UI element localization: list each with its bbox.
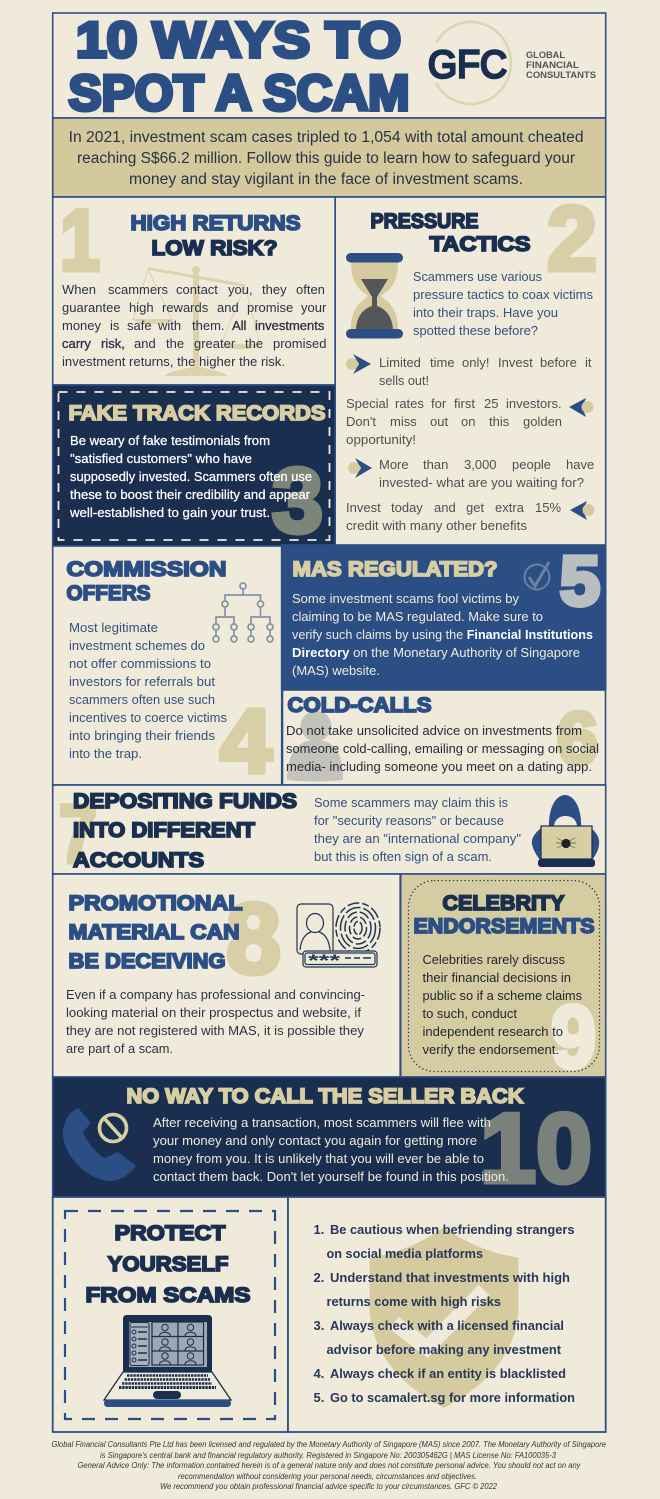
body text: your — [301, 300, 327, 315]
number 5: 5 — [560, 542, 600, 620]
heading: HIGH RETURNS — [130, 212, 300, 235]
body text: Celebrities rarely discuss — [422, 952, 565, 967]
number 10: 10 — [480, 1093, 592, 1203]
intro band: In 2021, investment scam cases tripled to 1,054 with total amount cheated — [69, 129, 584, 146]
heading — [370, 210, 530, 256]
intro band: reaching S$66.2 million. Follow this guide to learn how to safeguard your — [77, 150, 575, 167]
body text: but this is often sign of a scam. — [314, 849, 492, 864]
bullet 3: people — [512, 457, 551, 472]
body text: promised — [273, 336, 326, 351]
logo: GFC — [428, 22, 597, 104]
icon: check mark — [524, 562, 550, 590]
icon: shield with check — [370, 1227, 518, 1408]
body text: and — [134, 336, 156, 351]
tips text: 3. — [314, 1318, 324, 1333]
bullet 1: it — [585, 355, 592, 370]
body text: are part of a scam. — [66, 1041, 173, 1056]
footer disclaimer: We recommend you obtain professional financial advice specific to your circumstances. GFC © 2022 — [160, 1481, 497, 1491]
heading: NO WAY TO CALL THE SELLER BACK — [126, 1085, 524, 1108]
heading: LOW RISK? — [152, 237, 278, 260]
number 7: 7 — [59, 789, 97, 880]
body text: these to boost their credibility and appear — [70, 487, 311, 502]
bullet 3: than — [423, 457, 448, 472]
icon: referral network — [213, 583, 273, 642]
icon: phone — [63, 1108, 136, 1181]
bullet 1: only! — [462, 355, 489, 370]
body text: guarantee — [62, 300, 121, 315]
icon: hooded hacker with laptop — [532, 795, 599, 867]
bullet 2: Special — [346, 396, 389, 411]
footer disclaimer: is Singapore's central bank and financial regulatory authority. Registered in Singapore No: 200305462G | MAS License No: FA100035-3 — [100, 1450, 556, 1460]
bullet 1: Invest — [498, 355, 533, 370]
body text: investors for referrals but — [69, 674, 215, 689]
body text: often — [296, 282, 325, 297]
bullet 4: extra — [495, 500, 525, 515]
body text: scammers often use such — [69, 692, 215, 707]
body text: they are an "international company" — [314, 831, 521, 846]
panel 4: commission offers — [53, 546, 282, 792]
body text: not offer commissions to — [69, 656, 211, 671]
bullet 2: investors. — [506, 396, 562, 411]
body text: well-established to gain your trust. — [69, 505, 270, 520]
body text: verify the endorsement. — [422, 1042, 559, 1057]
bullet 2: opportunity! — [346, 432, 416, 447]
tips text: Always check with a licensed financial — [330, 1318, 564, 1333]
body text: the — [166, 336, 184, 351]
body text: investments — [255, 318, 325, 333]
heading: MAS REGULATED? — [292, 558, 498, 581]
body text: (MAS) website. — [292, 663, 380, 678]
number 6: 6 — [557, 697, 598, 780]
body text: safe — [127, 318, 152, 333]
number 2: 2 — [547, 188, 597, 290]
tips text: 2. — [314, 1270, 324, 1285]
bullet 4: credit with many other benefits — [346, 518, 528, 533]
body text: contact — [176, 282, 218, 297]
heading: FROM SCAMS — [86, 1284, 250, 1307]
body text: media- including someone you meet on a dating app. — [286, 759, 592, 774]
body text: into bringing their friends — [69, 728, 216, 743]
bullet 2 — [346, 396, 594, 447]
body text: for "security reasons" or because — [314, 813, 504, 828]
tips text: Be cautious when befriending strangers — [330, 1222, 574, 1237]
tips text: advisor before making any investment — [326, 1342, 562, 1357]
bullet 1: sells out! — [379, 373, 429, 388]
body text: with — [157, 318, 181, 333]
panel: protect yourself — [53, 1197, 288, 1432]
number 3: 3 — [272, 450, 323, 552]
title: 10 WAYS TO — [76, 12, 401, 68]
bullet 2: for — [431, 396, 447, 411]
body text: scammers — [108, 282, 168, 297]
panel: protect yourself tips list — [288, 1197, 606, 1432]
body text: verify such claims by using the Financial Institutions — [292, 627, 593, 642]
bullet 3: have — [566, 457, 594, 472]
heading — [68, 892, 243, 973]
icon: laptop with video call — [104, 1315, 231, 1407]
intro band: money and stay vigilant in the face of investment scams. — [129, 171, 523, 188]
panel 9: celebrity endorsements — [401, 874, 606, 1086]
heading: ACCOUNTS — [73, 849, 204, 872]
heading — [414, 892, 594, 938]
body text: rewards — [162, 300, 209, 315]
heading: DEPOSITING FUNDS — [73, 790, 297, 813]
body text — [153, 1115, 509, 1184]
bullet 1: time — [430, 355, 455, 370]
logo: GFC: GLOBAL — [526, 50, 565, 61]
body text — [314, 795, 521, 864]
number 8: 8 — [226, 883, 281, 995]
panel 1: high returns low risk — [53, 193, 335, 385]
intro text: spotted these before? — [413, 323, 538, 338]
bullet 4 — [346, 500, 594, 533]
body text — [286, 723, 599, 774]
bullet 1: before — [540, 355, 577, 370]
icon: identity and fingerprint — [297, 903, 380, 970]
heading: PROMOTIONAL — [68, 892, 243, 915]
bullet 2: Don't — [346, 414, 376, 429]
bullet 4: Invest — [346, 500, 381, 515]
body text: them. — [192, 318, 225, 333]
footer disclaimer — [52, 1439, 606, 1491]
footer disclaimer: recommendation without considering your personal needs, circumstances and objectives. — [178, 1471, 477, 1481]
body text: Do not take unsolicited advice on investments from — [286, 723, 582, 738]
body text: you, — [228, 282, 253, 297]
heading — [66, 558, 226, 605]
body text: When — [62, 282, 96, 297]
body text: carry — [62, 336, 91, 351]
tips text: returns come with high risks — [326, 1294, 501, 1309]
panel 3: fake track records — [53, 385, 335, 552]
body text: the — [245, 336, 263, 351]
body text: independent research to — [422, 1024, 563, 1039]
panel 5: MAS regulated — [282, 542, 606, 690]
body text: contact them back. Don't let yourself be found in this position. — [153, 1169, 509, 1184]
tips text: on social media platforms — [326, 1246, 483, 1261]
bullet 2: golden — [523, 414, 562, 429]
heading — [73, 790, 297, 872]
tips text: 5. — [314, 1390, 324, 1405]
intro text: into their traps. Have you — [413, 305, 558, 320]
logo: GFC: GFC — [428, 44, 507, 86]
icon: prohibited sign — [100, 1114, 126, 1142]
bullet 2: rates — [395, 396, 424, 411]
bullet 1 — [346, 354, 592, 388]
tips text: 4. — [314, 1366, 324, 1381]
panel 7: depositing funds — [53, 785, 606, 880]
intro text — [413, 269, 593, 338]
panel 10: no way to call the seller back — [53, 1077, 606, 1203]
heading: ENDORSEMENTS — [414, 915, 594, 938]
intro text: pressure tactics to coax victims — [413, 287, 593, 302]
bullet 3: invested- what are you waiting for? — [379, 475, 584, 490]
icon: person silhouette — [287, 711, 343, 782]
panel 8: promotional material — [53, 874, 400, 1077]
number 9: 9 — [551, 987, 596, 1086]
tips text: 1. — [314, 1222, 324, 1237]
body text: looking material on their prospectus and website, if — [66, 1005, 361, 1020]
heading: COLD-CALLS — [288, 694, 432, 717]
body text: "satisfied customers" who have — [70, 451, 252, 466]
body text: money from you. It is unlikely that you will ever be able to — [153, 1151, 484, 1166]
logo: GFC: CONSULTANTS — [526, 70, 597, 81]
body text: public so if a scheme claims — [422, 988, 582, 1003]
title: SPOT A SCAM — [68, 65, 410, 121]
body text: Even if a company has professional and convincing- — [66, 987, 365, 1002]
heading: MATERIAL CAN — [68, 921, 240, 944]
body text: greater — [194, 336, 236, 351]
bullet 4: today — [391, 500, 423, 515]
body text: promise — [247, 300, 293, 315]
title — [68, 12, 410, 121]
body text: your money and only contact you again for getting more — [153, 1133, 477, 1148]
bullet 3: More — [379, 457, 409, 472]
heading: PRESSURE — [370, 210, 478, 233]
body text: money — [62, 318, 102, 333]
icon: identity and fingerprint: *** — [308, 951, 341, 970]
tips text: Go to scamalert.sg for more information — [330, 1390, 575, 1405]
heading: COMMISSION — [66, 558, 226, 581]
body text: to such, conduct — [422, 1006, 517, 1021]
bullet 2: first — [454, 396, 475, 411]
bullet 3: 3,000 — [464, 457, 497, 472]
bullet 4: and — [434, 500, 456, 515]
bullet 2: 25 — [484, 396, 498, 411]
tips text — [314, 1222, 575, 1405]
body text: After receiving a transaction, most scammers will flee with — [153, 1115, 491, 1130]
body text: they are not registered with MAS, it is possible they — [66, 1023, 364, 1038]
body text: into the trap. — [69, 746, 142, 761]
intro band — [53, 118, 606, 197]
bullet 4: get — [466, 500, 484, 515]
body text: supposedly invested. Scammers often use — [70, 469, 312, 484]
heading: CELEBRITY — [442, 892, 564, 915]
heading — [130, 212, 300, 260]
number 4: 4 — [220, 692, 272, 792]
heading: OFFERS — [66, 582, 150, 605]
number 1: 1 — [60, 193, 100, 289]
body text: All — [232, 318, 247, 333]
body text: Some scammers may claim this is — [314, 795, 508, 810]
body text: Some investment scams fool victims by — [292, 591, 519, 606]
body text — [62, 282, 327, 369]
header: title and logo — [53, 12, 606, 121]
icon: scales — [132, 266, 261, 376]
heading: INTO DIFFERENT — [73, 819, 255, 842]
panel 2: pressure tactics — [335, 188, 606, 546]
body text: claiming to be MAS regulated. Make sure to — [292, 609, 543, 624]
intro text: Scammers use various — [413, 269, 542, 284]
tips text: Always check if an entity is blacklisted — [330, 1366, 566, 1381]
body text — [69, 620, 227, 761]
body text: incentives to coerce victims — [69, 710, 227, 725]
heading: BE DECEIVING — [68, 950, 226, 973]
body text: high — [129, 300, 154, 315]
bullet 2: on — [461, 414, 475, 429]
body text: investment returns, the higher the risk. — [62, 354, 285, 369]
body text: Most legitimate — [69, 620, 158, 635]
bullet 1: Limited — [379, 355, 421, 370]
body text: they — [262, 282, 287, 297]
icon: hourglass — [346, 253, 403, 338]
footer disclaimer: General Advice Only: The information contained herein is of a general nature only and does not constitute personal advice. You should not act on any — [78, 1460, 581, 1470]
heading — [86, 1222, 250, 1307]
body text: Directory on the Monetary Authority of Singapore — [292, 645, 580, 660]
bullet 4: 15% — [535, 500, 561, 515]
body text: and — [217, 300, 239, 315]
body text — [69, 433, 312, 520]
body text: investment schemes do — [69, 638, 205, 653]
body text: someone cold-calling, emailing or messaging on social — [286, 741, 599, 756]
bullet 2: out — [430, 414, 448, 429]
bullet 2: miss — [390, 414, 417, 429]
heading: PROTECT — [114, 1222, 226, 1245]
body text — [66, 987, 365, 1056]
body text — [422, 952, 582, 1057]
body text — [292, 591, 593, 678]
body text: Be weary of fake testimonials from — [70, 433, 270, 448]
logo: GFC: FINANCIAL — [526, 60, 579, 71]
body text: is — [110, 318, 120, 333]
panel 6: cold-calls — [282, 690, 606, 785]
body text: risk, — [101, 336, 125, 351]
bullet 3 — [348, 457, 594, 490]
body text: their financial decisions in — [422, 970, 571, 985]
heading: FAKE TRACK RECORDS — [68, 402, 326, 425]
tips text: Understand that investments with high — [330, 1270, 570, 1285]
heading: YOURSELF — [108, 1253, 229, 1276]
heading: TACTICS — [430, 233, 530, 256]
bullet 2: this — [489, 414, 510, 429]
